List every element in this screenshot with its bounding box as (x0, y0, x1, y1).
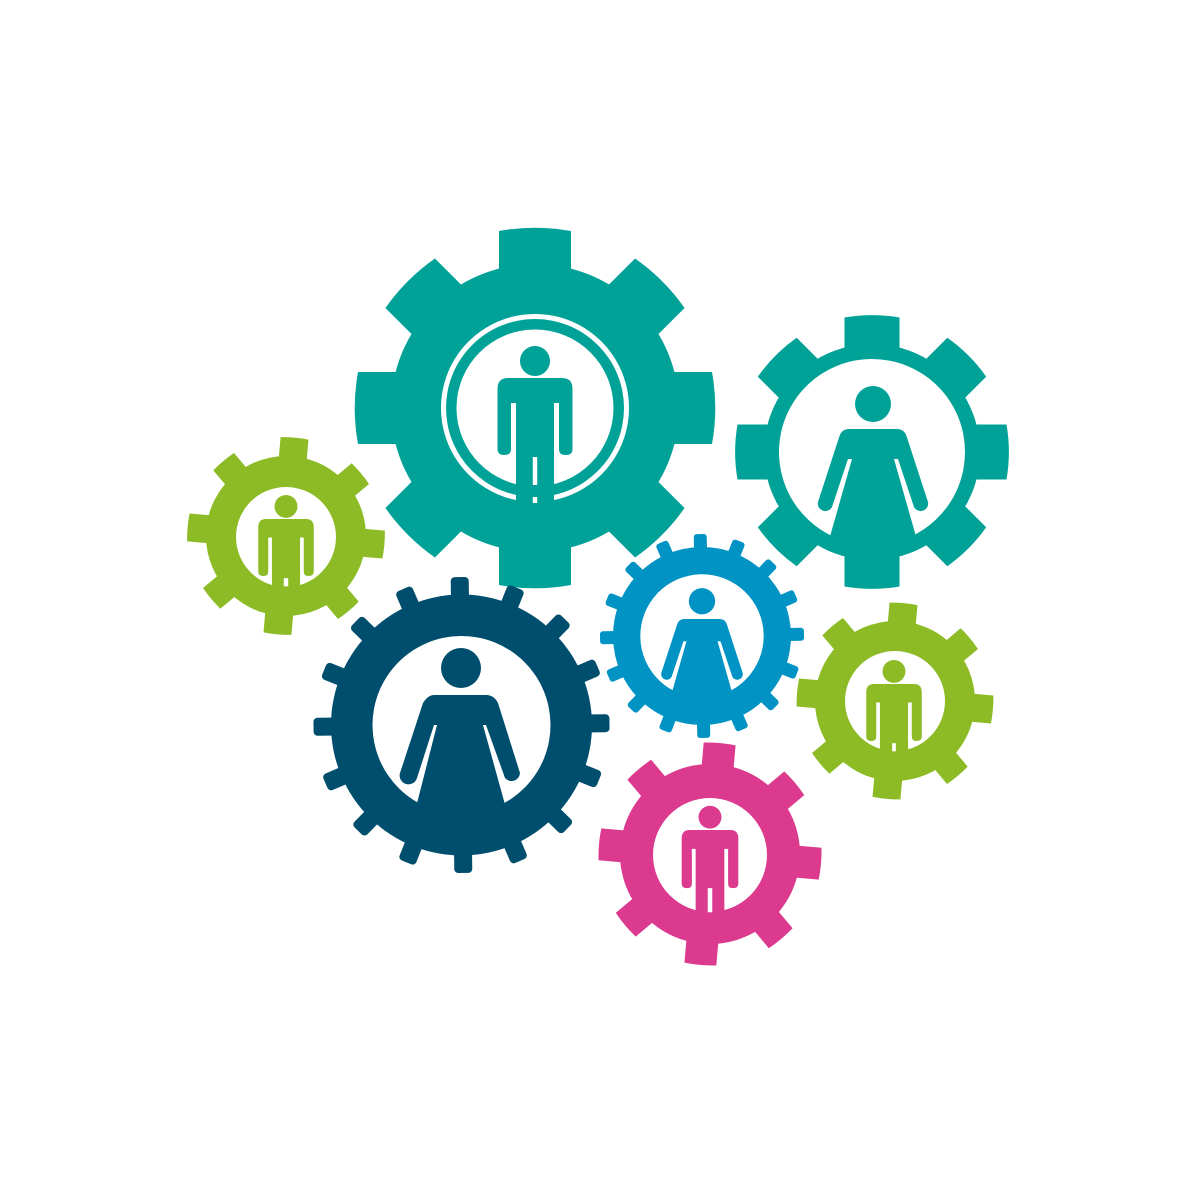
gear shape: green right (789, 595, 1001, 807)
gear: navy with woman (312, 575, 611, 875)
hole: magenta gear (653, 798, 767, 912)
gear shape: magenta (589, 733, 831, 975)
gear shape: navy (312, 575, 611, 875)
icon: man in green right gear (866, 660, 922, 769)
icon: woman in teal gear (818, 386, 928, 547)
icon: man in large teal gear (498, 346, 572, 506)
hole: green right gear (845, 651, 945, 751)
icon: woman in blue gear (661, 588, 743, 706)
gear: large teal with man (355, 228, 715, 588)
icon: woman in navy gear (400, 648, 520, 819)
icon: man in magenta gear (682, 806, 738, 927)
gear shape: green left (179, 429, 393, 643)
gear shape: blue (598, 532, 806, 740)
gear: magenta with man (589, 733, 831, 975)
hole: green left gear (236, 487, 336, 587)
gear: small green left with man (179, 429, 393, 643)
gear: blue with woman (598, 532, 806, 740)
gear: green right with man (789, 595, 1001, 807)
gear: teal with woman (735, 315, 1009, 589)
gear shape: large teal (355, 228, 715, 588)
icon: man in green left gear (258, 495, 314, 604)
gear shape: teal (735, 315, 1009, 589)
